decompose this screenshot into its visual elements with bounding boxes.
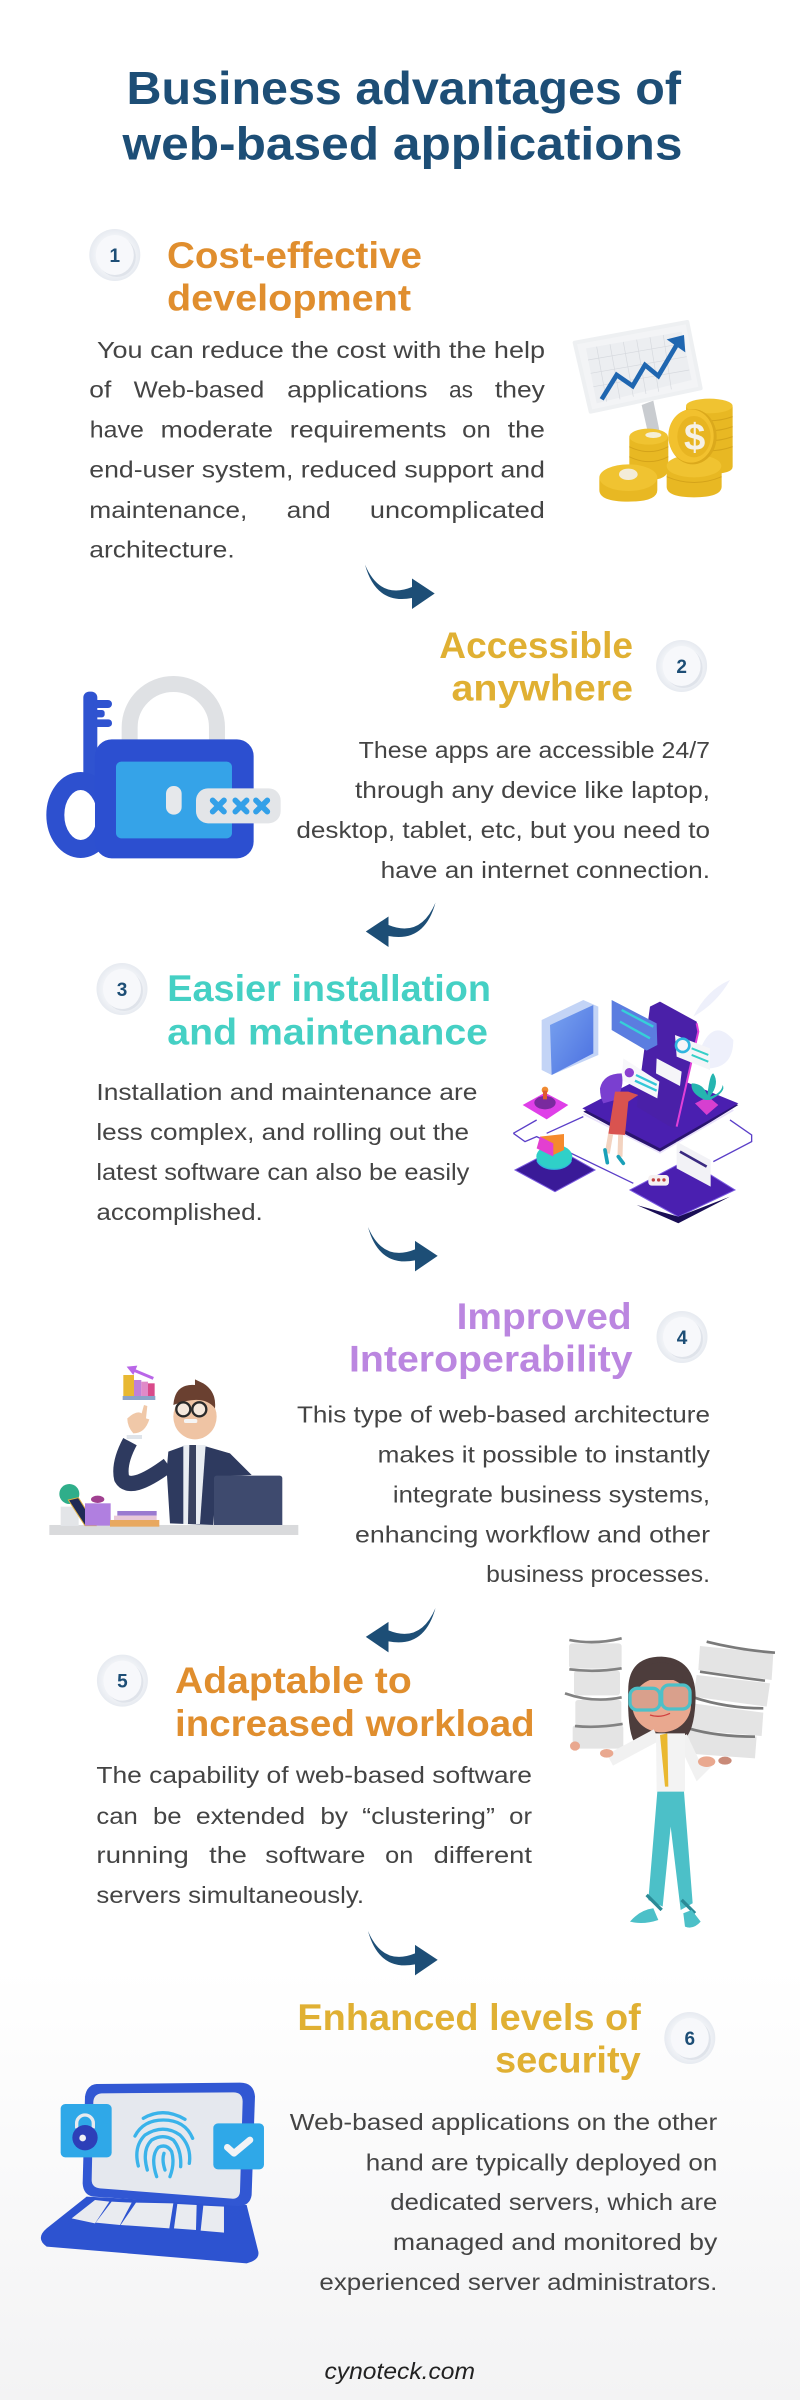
badge 4 xyxy=(656,1311,708,1363)
badge 3 xyxy=(96,963,148,1015)
title: Business advantages of xyxy=(126,62,682,114)
heading 1: development xyxy=(167,278,411,318)
heading 5 xyxy=(175,1660,535,1744)
body text 1: of xyxy=(89,376,112,402)
body text 5: servers simultaneously. xyxy=(96,1882,364,1908)
badge 5 xyxy=(97,1655,148,1707)
heading 5: increased workload xyxy=(175,1703,535,1744)
body text 1: end-user system, reduced support and xyxy=(89,457,545,483)
illustration: chart board and coins: $ xyxy=(684,416,705,459)
title: web-based applications xyxy=(121,118,682,170)
body text 5: The capability of web-based software xyxy=(96,1762,532,1788)
illustration: padlock and key xyxy=(55,684,281,858)
body text 4: enhancing workflow and other xyxy=(355,1521,710,1547)
body text 5: extended xyxy=(196,1803,305,1829)
body text 5: software xyxy=(265,1842,365,1868)
body text 3: accomplished. xyxy=(96,1199,263,1225)
body text 1: Web-based xyxy=(134,376,264,402)
illustration: chart board and coins xyxy=(575,322,733,502)
body text 2: These apps are accessible 24/7 xyxy=(359,737,710,763)
body text 6: hand are typically deployed on xyxy=(366,2150,717,2176)
badge 6 xyxy=(664,2012,715,2064)
badge 3: 3 xyxy=(117,980,127,1001)
body text 1: moderate xyxy=(161,417,273,443)
section 1: cost-effective development xyxy=(89,229,733,562)
body text 3: Installation and maintenance are xyxy=(96,1079,477,1105)
body text 4: integrate business systems, xyxy=(393,1481,710,1507)
body text 1: have xyxy=(90,417,144,443)
heading 5: Adaptable to xyxy=(175,1660,412,1701)
body text 6: managed and monitored by xyxy=(393,2229,718,2255)
heading 6: Enhanced levels of xyxy=(297,1997,641,2038)
body text 5 xyxy=(96,1762,533,1908)
body text 2 xyxy=(296,737,710,883)
body text 2: have an internet connection. xyxy=(381,857,710,883)
body text 1: You can reduce the cost with the help xyxy=(97,337,545,363)
body text 4: business processes. xyxy=(486,1561,710,1587)
badge 4: 4 xyxy=(677,1328,688,1349)
body text 4: makes it possible to instantly xyxy=(378,1441,710,1467)
body text 1: uncomplicated xyxy=(370,497,545,523)
heading 2: anywhere xyxy=(452,667,633,708)
footer: website: cynoteck.com xyxy=(324,2358,475,2384)
body text 1: requirements xyxy=(290,417,446,443)
section 3: easier installation and maintenance xyxy=(96,963,752,1225)
body text 5: can xyxy=(96,1803,138,1829)
heading 3: Easier installation xyxy=(167,968,491,1009)
body text 1: maintenance, xyxy=(89,497,247,523)
heading 3 xyxy=(167,968,491,1052)
heading 4: Interoperability xyxy=(349,1338,633,1379)
body text 6: Web-based applications on the other xyxy=(290,2109,717,2135)
heading 2: Accessible xyxy=(439,625,633,666)
body text 4 xyxy=(297,1401,710,1587)
illustration: laptop with fingerprint xyxy=(41,2083,264,2263)
body text 5: running xyxy=(96,1842,189,1868)
body text 3 xyxy=(96,1079,477,1225)
body text 4: This type of web-based architecture xyxy=(297,1401,710,1427)
heading 3: and maintenance xyxy=(167,1011,488,1052)
body text 1 xyxy=(89,337,545,562)
body text 5: be xyxy=(153,1803,182,1829)
heading 6: security xyxy=(495,2040,641,2080)
body text 1: applications xyxy=(287,376,428,402)
heading 4 xyxy=(349,1296,633,1379)
badge 2 xyxy=(656,640,707,692)
heading 4: Improved xyxy=(457,1296,632,1337)
heading 2 xyxy=(439,625,633,708)
section 2: accessible anywhere xyxy=(55,625,710,883)
illustration: businessman at desk xyxy=(49,1366,298,1535)
body text 5: by xyxy=(320,1803,348,1829)
heading 1 xyxy=(167,235,422,318)
section 5: adaptable to increased workload xyxy=(96,1638,775,1928)
illustration: woman carrying server stacks xyxy=(565,1638,775,1928)
body text 3: latest software can also be easily xyxy=(96,1159,470,1185)
body text 1: the xyxy=(508,417,545,443)
arrow: 4 to 5 xyxy=(366,1608,436,1652)
body text 5: the xyxy=(209,1842,247,1868)
body text 1: architecture. xyxy=(89,536,235,562)
arrow: 1 to 2 xyxy=(365,565,435,609)
illustration: isometric app platform xyxy=(513,980,752,1223)
body text 5: on xyxy=(385,1842,413,1868)
body text 1: on xyxy=(462,417,491,443)
badge 2: 2 xyxy=(676,657,687,678)
body text 6 xyxy=(290,2109,718,2295)
arrow: 2 to 3 xyxy=(366,903,436,947)
body text 5: or xyxy=(509,1803,532,1829)
body text 2: through any device like laptop, xyxy=(355,777,710,803)
badge 6: 6 xyxy=(685,2029,695,2050)
arrow: 3 to 4 xyxy=(368,1227,438,1271)
title xyxy=(121,62,682,170)
body text 5: different xyxy=(434,1842,533,1868)
body text 1: as xyxy=(449,376,473,402)
heading 6 xyxy=(297,1997,641,2080)
section 4: improved interoperability xyxy=(49,1296,710,1587)
body text 3: less complex, and rolling out the xyxy=(96,1119,469,1145)
body text 1: they xyxy=(495,376,545,402)
body text 6: dedicated servers, which are xyxy=(390,2189,717,2215)
section 6: enhanced levels of security xyxy=(41,1997,718,2295)
body text 6: experienced server administrators. xyxy=(319,2269,717,2295)
badge 1 xyxy=(89,229,140,281)
body text 2: desktop, tablet, etc, but you need to xyxy=(296,817,710,843)
body text 5: “clustering” xyxy=(362,1803,495,1829)
heading 1: Cost-effective xyxy=(167,235,422,276)
badge 1: 1 xyxy=(110,246,121,267)
arrow: 5 to 6 xyxy=(368,1931,438,1975)
body text 1: and xyxy=(287,497,331,523)
badge 5: 5 xyxy=(117,1672,128,1693)
